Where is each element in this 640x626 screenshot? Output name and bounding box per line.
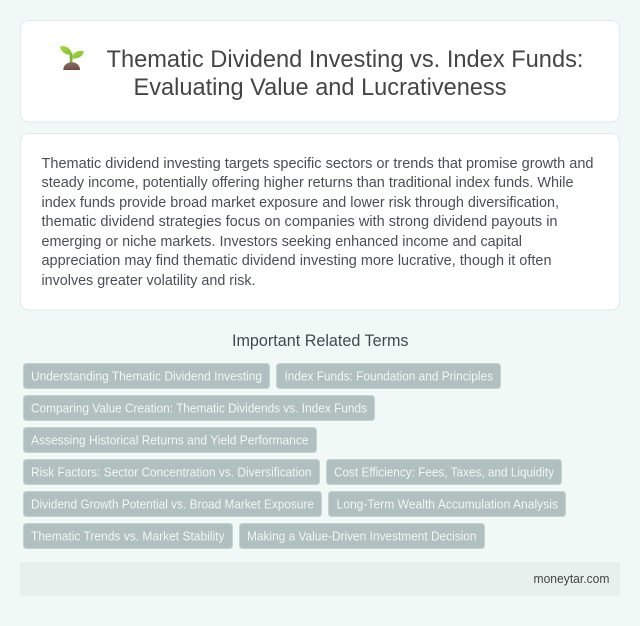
tag: long-term wealth [328, 492, 566, 516]
tag: long-term wealth: Long-Term Wealth Accumulation Analysis [336, 496, 558, 512]
icon: sprout [60, 46, 84, 70]
tag: thematic trends [24, 524, 232, 548]
title [106, 46, 584, 101]
tag: value-driven decision: Making a Value-Driven Investment Decision [247, 528, 476, 544]
heading: important related terms: Important Related Terms [232, 332, 408, 350]
text block: summary paragraph: appreciation may find thematic dividend investing more lucrative, though it often [42, 253, 552, 269]
tag: historical returns [24, 428, 316, 452]
tag: thematic trends: Thematic Trends vs. Market Stability [31, 528, 225, 544]
tag: dividend growth: Dividend Growth Potential vs. Broad Market Exposure [31, 496, 314, 512]
title: Evaluating Value and Lucrativeness [134, 74, 506, 101]
title: Thematic Dividend Investing vs. Index Funds: [106, 46, 584, 73]
panel: header [20, 20, 620, 122]
tag: comparing value creation [24, 396, 374, 420]
tag: risk factors: Risk Factors: Sector Concentration vs. Diversification [31, 464, 312, 480]
text block: summary paragraph: thematic dividend strategies focus on companies with strong dividend payouts in [42, 214, 558, 230]
tag: cost efficiency [326, 460, 562, 484]
tag list [24, 364, 566, 548]
panel: summary [20, 134, 620, 310]
tag: historical returns: Assessing Historical Returns and Yield Performance [31, 432, 308, 448]
text block: summary paragraph: Thematic dividend investing targets specific sectors or trends that promise growth and [42, 156, 594, 172]
tag: cost efficiency: Cost Efficiency: Fees, Taxes, and Liquidity [334, 464, 555, 480]
text block: summary paragraph [42, 156, 594, 289]
footer: moneytar.com [534, 571, 610, 586]
text block: summary paragraph: steady income, potentially offering higher returns than traditional index funds. While [42, 175, 574, 191]
tag: index funds: Index Funds: Foundation and Principles [284, 368, 493, 384]
text block: summary paragraph: index funds provide broad market exposure and lower risk through diversification, [42, 195, 559, 211]
tag: understanding thematic dividend investing: Understanding Thematic Dividend Investing [31, 368, 262, 384]
tag: index funds [276, 364, 500, 388]
tag: comparing value creation: Comparing Value Creation: Thematic Dividends vs. Index Funds [31, 400, 367, 416]
tag: understanding thematic dividend investing [24, 364, 270, 388]
tag: dividend growth [24, 492, 322, 516]
tag: value-driven decision [240, 524, 484, 548]
footer [20, 562, 620, 596]
text block: summary paragraph: emerging or niche markets. Investors seeking enhanced income and capital [42, 234, 522, 250]
tag: risk factors [24, 460, 320, 484]
text block: summary paragraph: involves greater volatility and risk. [42, 273, 256, 289]
